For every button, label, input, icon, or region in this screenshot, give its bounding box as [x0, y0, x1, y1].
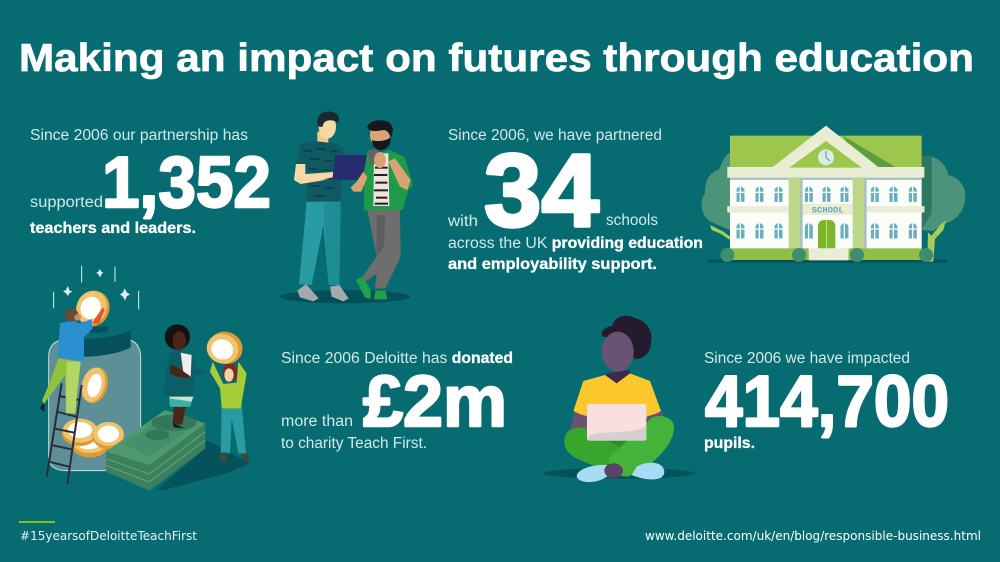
illustration: two men with tablet and phone: [280, 112, 413, 303]
number: £2m: £2m: [363, 362, 507, 442]
woman with coin: [221, 403, 246, 453]
panel: pupils stat: [704, 350, 949, 452]
money stack: [106, 410, 205, 491]
number: 414,700: 414,700: [705, 362, 949, 442]
number: 1,352: 1,352: [102, 143, 271, 223]
footer url: www.deloitte.com/uk/en/blog/responsible-business.html: [645, 528, 981, 543]
climbing person: [42, 358, 81, 413]
illustration: school building: [701, 126, 965, 263]
text: across the UK: across the UK providing education: [448, 235, 703, 252]
text: schools: schools: [606, 212, 658, 229]
footer hashtag: #15yearsofDeloitteTeachFirst: [20, 528, 197, 543]
text: pupils intro: Since 2006 we have impacted: [704, 350, 910, 367]
illustration: student with laptop: [543, 316, 695, 482]
title: Making an impact on futures through education: [19, 37, 974, 80]
text: employability support: and employability support.: [448, 256, 657, 273]
panel: schools stat: [447, 127, 703, 273]
woman on money: [173, 407, 182, 425]
panel: donation stat: [281, 350, 513, 452]
text: teachers and leaders: teachers and leaders.: [30, 220, 196, 237]
text: teachers intro: Since 2006 our partnership has: [30, 127, 248, 144]
text: donation intro: Since 2006 Deloitte has donated: [281, 350, 513, 367]
text: supported: supported: [30, 194, 103, 211]
footer accent line: [19, 521, 55, 523]
text: with: with: [447, 213, 478, 230]
illustration: coin jar and money: [40, 266, 250, 491]
number: 34: 34: [484, 133, 599, 248]
text: more than: more than: [281, 413, 353, 430]
label: school sign: SCHOOL: [812, 206, 844, 216]
coin in hand: [71, 286, 115, 331]
text: schools intro: Since 2006, we have partnered: [448, 127, 662, 144]
text: to charity: to charity Teach First.: [281, 435, 427, 452]
ladder: [47, 383, 82, 484]
text: pupils: pupils.: [704, 435, 755, 452]
panel: teachers stat: [30, 127, 271, 237]
